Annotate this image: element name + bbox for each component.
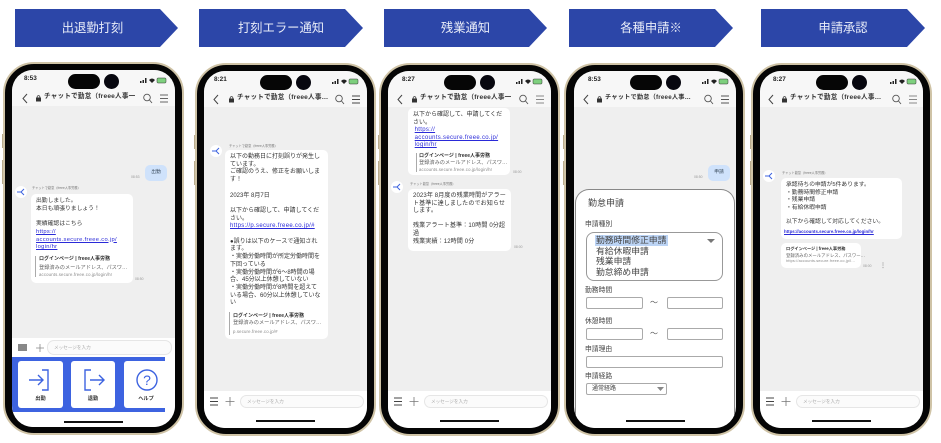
bot avatar bbox=[391, 181, 403, 193]
phone 5: 申請承認 chat: チャット勤怠（freee人事労務） bbox=[782, 171, 827, 175]
input bar bbox=[204, 391, 367, 429]
step arrow: 残業通知: 残業通知 bbox=[441, 21, 490, 35]
step arrow: 各種申請※: 各種申請※ bbox=[620, 21, 682, 35]
sent bubble: 申請 bbox=[708, 165, 730, 181]
bot message: link card: login/hr bbox=[415, 142, 437, 148]
bot message: 残業アラート: 残業実績：12時間 0分 bbox=[413, 239, 474, 245]
field: 申請経路: 申請経路 bbox=[585, 373, 612, 380]
bot message: https:// bbox=[36, 229, 56, 235]
phone 4: 各種申請 form: チャットで勤怠（freee人事… bbox=[605, 94, 691, 101]
bot message: ・実働労働時間が8時間を超えて bbox=[230, 285, 317, 291]
bot message: accounts.secure.freee.co.jp/ bbox=[36, 237, 117, 243]
bot message: 残業アラート: ト基準に達しましたのでお知らせ bbox=[413, 201, 505, 207]
bot message: いる場合、60分以上休憩していな bbox=[230, 293, 320, 299]
sent bubble: 申請: 申請 bbox=[714, 170, 724, 175]
button: ヘルプ bbox=[124, 361, 168, 408]
field: 休憩時間: 休憩時間 bbox=[585, 318, 612, 325]
bot message: 残業アラート: 2023年 8月度の残業時間がアラー bbox=[413, 193, 506, 199]
phone 5: 申請承認 chat: メッセージを入力 bbox=[803, 398, 840, 404]
phone 3: 残業通知 chat: 08:00 bbox=[513, 170, 522, 174]
bot message: link card: accounts.secure.freee.co.jp/ bbox=[415, 135, 498, 141]
phone 4: 各種申請 form bbox=[563, 63, 745, 436]
bot avatar bbox=[210, 145, 222, 157]
phone 5: 申請承認 chat bbox=[750, 63, 932, 436]
field: 勤務時間: 勤務時間 bbox=[585, 287, 612, 294]
input bar bbox=[12, 338, 175, 428]
phone 3: 残業通知 chat bbox=[378, 63, 560, 436]
link card: ログインページ | freee人事労務 bbox=[786, 246, 846, 251]
button: ヘルプ: ? bbox=[143, 372, 151, 388]
button: 出勤 bbox=[18, 361, 63, 408]
bot message: 登録済みのメールアドレス、パスワ… bbox=[39, 264, 127, 270]
phone 2: 打刻エラー通知 chat: メッセージを入力 bbox=[247, 398, 284, 404]
bot message: 残業アラート: 残業アラート基準：10時間 0分超 bbox=[413, 223, 505, 229]
step arrow: 申請承認 bbox=[761, 9, 925, 47]
bot message: 以下から確認して、申請してくだ bbox=[230, 208, 319, 214]
phone 5: 申請承認 chat: 8:27 bbox=[773, 76, 786, 83]
button: 退勤: 退勤 bbox=[88, 396, 98, 402]
panel: 勤怠申請 form: 有給休暇申請 bbox=[596, 246, 649, 256]
panel: 勤怠申請 form bbox=[575, 189, 735, 429]
bot message: 出勤しました。 bbox=[36, 198, 77, 204]
phone 1: 出退勤打刻 chat bbox=[2, 62, 184, 435]
bot message: link card: 登録済みのメールアドレス、パスワ… bbox=[419, 160, 507, 166]
phone 4: 各種申請 form: 8:53 bbox=[588, 76, 601, 83]
panel: 勤怠申請 form: 通常経路 bbox=[592, 386, 616, 392]
bot message: 承認待ち: 承認待ちの申請が5件あります。 bbox=[786, 182, 870, 188]
phone 1: 出退勤打刻 chat: 8:53 bbox=[24, 75, 37, 82]
form heading: 勤怠申請 bbox=[588, 198, 624, 208]
bot message: 合、45分以上休憩していない bbox=[230, 277, 308, 283]
bot avatar bbox=[15, 186, 27, 198]
phone 3: 残業通知 chat: チャットで勤怠（freee人事一 bbox=[420, 94, 511, 101]
phone 3: 残業通知 chat: 8:27 bbox=[402, 76, 415, 83]
sent bubble: 出勤: 出勤 bbox=[151, 170, 161, 175]
bot message: accounts.secure.freee.co.jp/login/hr bbox=[39, 272, 112, 277]
bot message: 本日も頑張りましょう！ bbox=[36, 206, 100, 212]
step arrow: 打刻エラー通知 bbox=[199, 9, 363, 47]
phone 2: 打刻エラー通知 chat bbox=[194, 63, 376, 436]
bot message: p.secure.freee.co.jp/# bbox=[233, 329, 278, 334]
step arrow: 残業通知 bbox=[384, 9, 547, 47]
bot message: link card bbox=[408, 108, 510, 175]
phone 2: 打刻エラー通知 chat: チャットで勤怠（freee人事… bbox=[237, 94, 328, 101]
bot message bbox=[31, 194, 133, 283]
panel: 勤怠申請 form: 勤務時間修正申請 bbox=[596, 235, 666, 245]
field: 申請種別: 申請種別 bbox=[585, 221, 612, 228]
phone 3: 残業通知 chat: メッセージを入力 bbox=[431, 398, 468, 404]
bot message: ています。 bbox=[230, 162, 259, 168]
bot message: 承認待ち: 以下から確認して対応してください。 bbox=[786, 219, 884, 225]
bot message: 残業アラート: 過 bbox=[413, 231, 419, 237]
field: 申請理由: 申請理由 bbox=[585, 346, 612, 353]
panel: 勤怠申請 form: ～ bbox=[650, 298, 658, 307]
bot message: す！ bbox=[230, 177, 242, 183]
bot message: 残業アラート: します。 bbox=[413, 208, 437, 214]
panel: 勤怠申請 form: 残業申請 bbox=[596, 256, 631, 266]
bot message: さい。 bbox=[230, 216, 248, 222]
panel: 勤怠申請 form: ～ bbox=[650, 329, 658, 338]
phone 3: 残業通知 chat: チャット勤怠（freee人事労務） bbox=[410, 182, 455, 186]
bot message: 以下の勤務日に打刻誤りが発生し bbox=[230, 154, 320, 160]
bot message: 承認待ち: ・勤務時間修正申請 bbox=[786, 190, 838, 196]
link card bbox=[781, 243, 861, 268]
button: ヘルプ: ヘルプ bbox=[138, 396, 154, 402]
input bar bbox=[760, 391, 923, 429]
bot message: link card: さい。 bbox=[413, 120, 431, 126]
phone 1: 出退勤打刻 chat: チャットで勤怠（freee人事労務） bbox=[32, 186, 81, 190]
input bar bbox=[388, 391, 551, 429]
bot message: ログインページ | freee人事労務 bbox=[233, 312, 304, 318]
bot message bbox=[225, 150, 328, 339]
bot message: 承認待ち: https://accounts.secure.freee.co.jp/login/hr bbox=[784, 229, 874, 234]
bot message: link card: accounts.secure.freee.co.jp/login/hr bbox=[419, 167, 492, 172]
phone 4: 各種申請 form: 08:50 bbox=[694, 175, 702, 179]
bot message: ログインページ | freee人事労務 bbox=[39, 256, 110, 262]
bot message: 実績確認はこちら bbox=[36, 221, 82, 227]
step arrow: 出退勤打刻: 出退勤打刻 bbox=[62, 21, 123, 35]
bot message: link card: 以下から確認して、申請してくだ bbox=[413, 112, 502, 118]
bot message: 2023年 8月7日 bbox=[230, 193, 270, 199]
bot message: ご確認のうえ、修正をお願いしま bbox=[230, 169, 320, 175]
bot message: ●誤りは以下のケースで通知され bbox=[230, 239, 317, 245]
bot message: 承認待ち bbox=[781, 178, 902, 239]
step arrow: 出退勤打刻 bbox=[15, 9, 178, 47]
bot message: login/hr bbox=[36, 244, 57, 250]
link card: https://accounts.secure.freee.co.jp/l… bbox=[786, 259, 855, 263]
bot message: ・実働労働時間が所定労働時間を bbox=[230, 254, 320, 260]
phone 1: 出退勤打刻 chat: チャットで勤怠（freee人事一 bbox=[44, 93, 135, 100]
panel: 勤怠申請 form: 勤怠締め申請 bbox=[596, 267, 649, 277]
phone 1: 出退勤打刻 chat: 08:53 bbox=[131, 175, 140, 179]
rich menu: 出勤 / 退勤 / ヘルプ bbox=[12, 357, 165, 412]
bot message: ・実働労働時間が6〜8時間の場 bbox=[230, 270, 315, 276]
phone 2: 打刻エラー通知 chat: 8:21 bbox=[214, 76, 227, 83]
link card: 登録済みのメールアドレス、パスワー… bbox=[786, 253, 865, 258]
bot message: link card: https:// bbox=[415, 127, 435, 133]
sent bubble: 出勤 bbox=[145, 165, 167, 181]
bot message: 登録済みのメールアドレス、パスワ… bbox=[233, 320, 321, 326]
bot message: 残業アラート bbox=[408, 189, 511, 251]
phone 3: 残業通知 chat: 08:00 bbox=[514, 245, 522, 249]
step arrow: 申請承認: 申請承認 bbox=[818, 21, 868, 35]
step arrow: 打刻エラー通知: 打刻エラー通知 bbox=[238, 21, 324, 35]
step arrow: 各種申請※ bbox=[569, 9, 733, 47]
bot message: 承認待ち: ・有給休暇申請 bbox=[786, 205, 827, 211]
phone 5: 申請承認 chat: ⋮ bbox=[880, 263, 886, 269]
bot avatar bbox=[763, 170, 775, 182]
button: 退勤 bbox=[71, 361, 115, 408]
phone 5: 申請承認 chat: 08:00 bbox=[863, 264, 872, 268]
button: 出勤: 出勤 bbox=[35, 396, 46, 402]
input bar: メッセージを入力 bbox=[54, 345, 91, 350]
bot message: ます。 bbox=[230, 246, 247, 252]
bot message: link card: ログインページ | freee人事労務 bbox=[419, 152, 490, 158]
bot message: 下回っている bbox=[230, 262, 266, 268]
bot message: い bbox=[230, 300, 236, 306]
phone 2: 打刻エラー通知 chat: チャットで勤怠（freee人事労務） bbox=[229, 144, 278, 148]
phone 5: 申請承認 chat: チャットで勤怠（freee人事… bbox=[790, 94, 881, 101]
bot message: https://p.secure.freee.co.jp/# bbox=[230, 223, 315, 229]
phone 1: 出退勤打刻 chat: 08:50 bbox=[135, 277, 144, 281]
bot message: 承認待ち: ・残業申請 bbox=[786, 197, 815, 203]
